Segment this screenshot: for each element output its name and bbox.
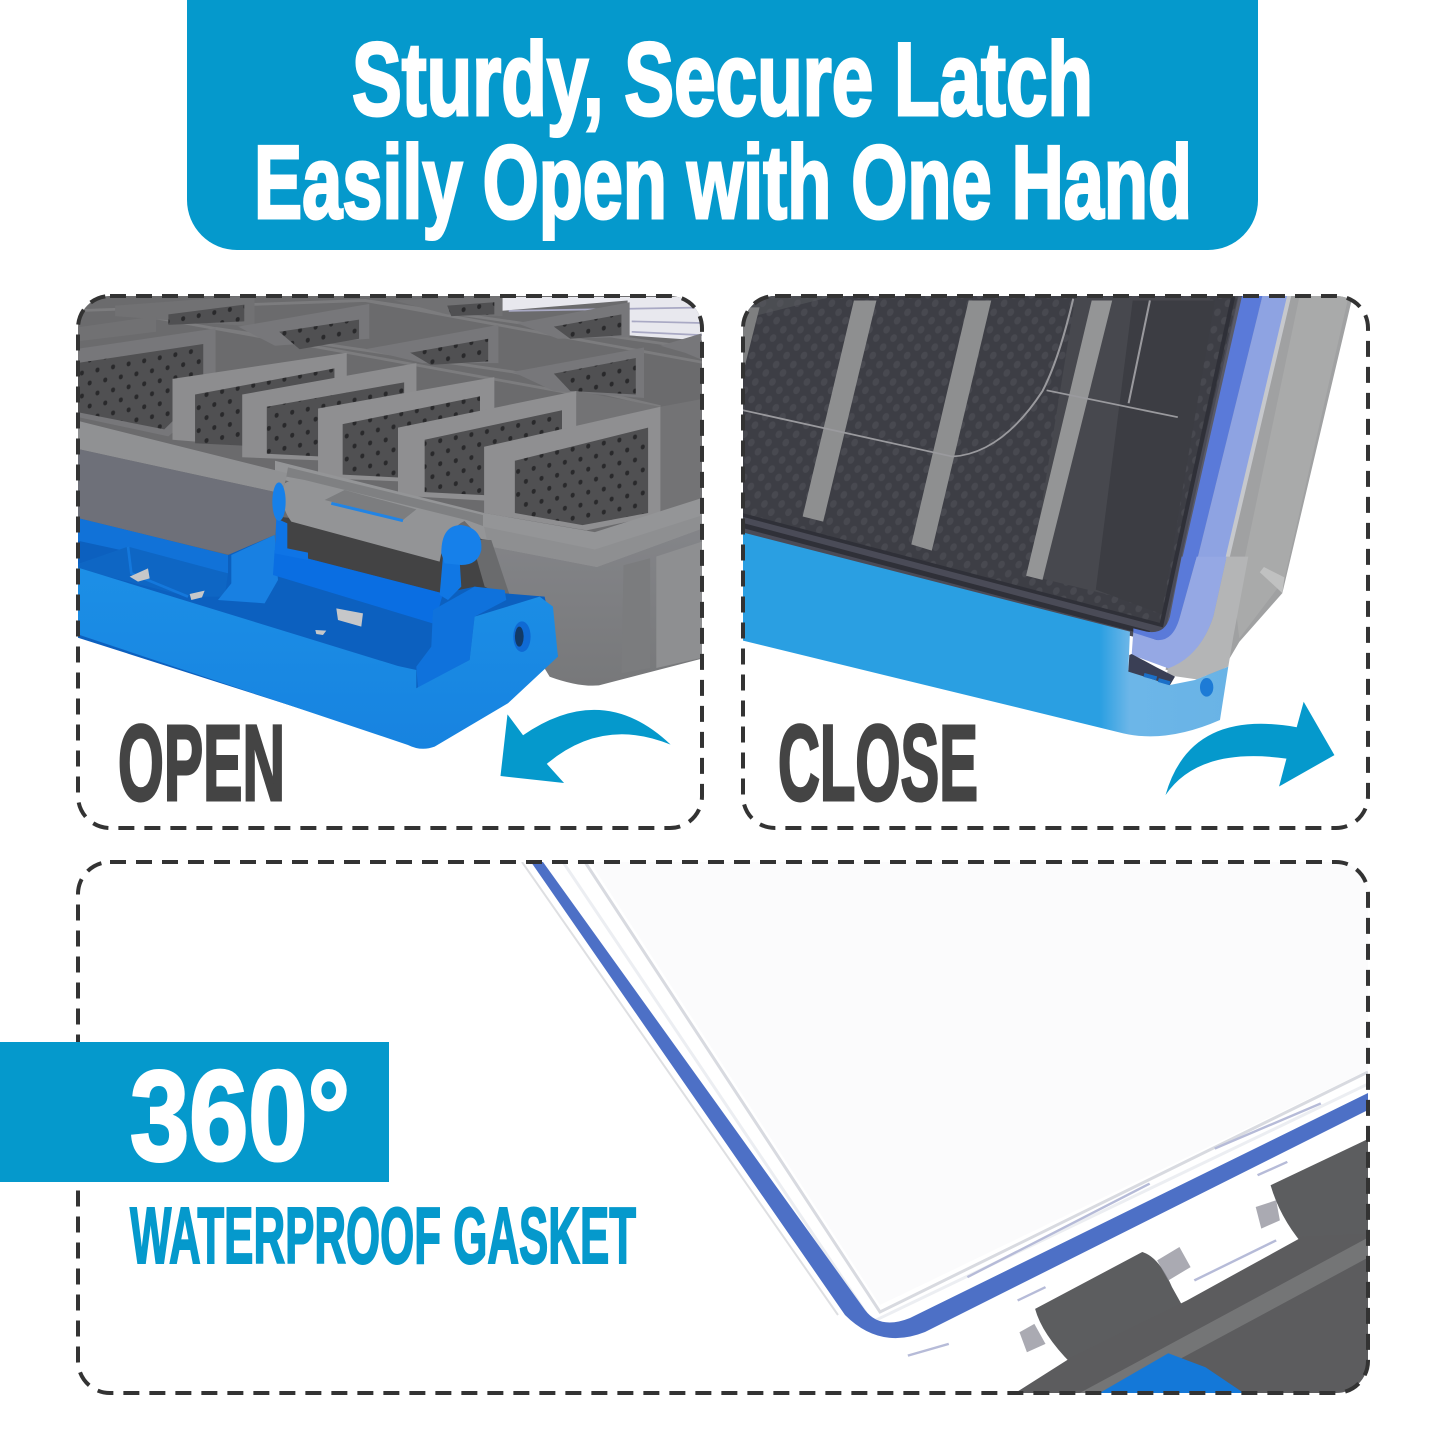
- tray side: [494, 530, 702, 686]
- rollers: [1035, 1252, 1183, 1364]
- dashed border: [78, 296, 702, 828]
- right lug: [416, 587, 506, 688]
- label band: 360 degrees: 360°: [130, 1045, 350, 1188]
- grey tray: [1166, 290, 1354, 677]
- wall ridges: [70, 300, 726, 407]
- back row: [115, 304, 254, 320]
- front lip: [75, 567, 558, 749]
- label: waterproof gasket: WATERPROOF GASKET: [130, 1191, 636, 1280]
- blue latch body: [733, 530, 1228, 736]
- divider D5: [398, 391, 576, 506]
- lid frame: [735, 297, 1233, 625]
- divider D6: [484, 407, 660, 530]
- label: CLOSE: CLOSE: [778, 702, 978, 823]
- latches and tray: [908, 1103, 1369, 1397]
- notch: [1128, 654, 1175, 685]
- gasket: [1197, 290, 1291, 560]
- rim right join: [286, 467, 483, 526]
- rim left: [75, 420, 288, 493]
- wall right: [576, 391, 660, 407]
- label band: 360 degrees: [0, 1042, 389, 1188]
- latch detail: [75, 420, 558, 749]
- inner grey panel: [75, 448, 281, 555]
- heading line 1: Sturdy, Secure Latch: [352, 22, 1093, 138]
- arrow: close: [1166, 702, 1334, 795]
- panel: closed latch: [733, 290, 1368, 828]
- grey curl: [1167, 557, 1248, 679]
- pale gasket: [1132, 557, 1227, 668]
- studs: [130, 568, 363, 635]
- header banner: [187, 0, 1258, 250]
- divider D4: [318, 377, 494, 485]
- panel: waterproof gasket: [0, 862, 1369, 1397]
- translucent dividers: [803, 300, 876, 522]
- hinge: [282, 480, 466, 562]
- dashed border: [78, 862, 1368, 1393]
- label: OPEN: OPEN: [118, 702, 285, 823]
- photo: closed lid with latch: [733, 290, 1354, 736]
- panel: open latch: [70, 290, 726, 828]
- arrow: open: [500, 710, 671, 783]
- photo: open tray with latch: [70, 290, 726, 749]
- divider D3: [242, 363, 416, 464]
- raised block: [218, 535, 278, 603]
- floor: [78, 518, 558, 710]
- photo: clear lid with blue gasket: [522, 862, 1369, 1397]
- gasket: [531, 862, 1368, 1338]
- bail: [273, 550, 443, 624]
- tray body: [1008, 1234, 1369, 1397]
- latch end detail: [733, 530, 1248, 736]
- strong gasket: [1133, 557, 1197, 640]
- divider D1: [70, 328, 216, 436]
- dashed border: [743, 296, 1368, 828]
- divider D2: [172, 353, 347, 442]
- rim: [275, 460, 702, 550]
- dark behind hinge: [280, 517, 488, 592]
